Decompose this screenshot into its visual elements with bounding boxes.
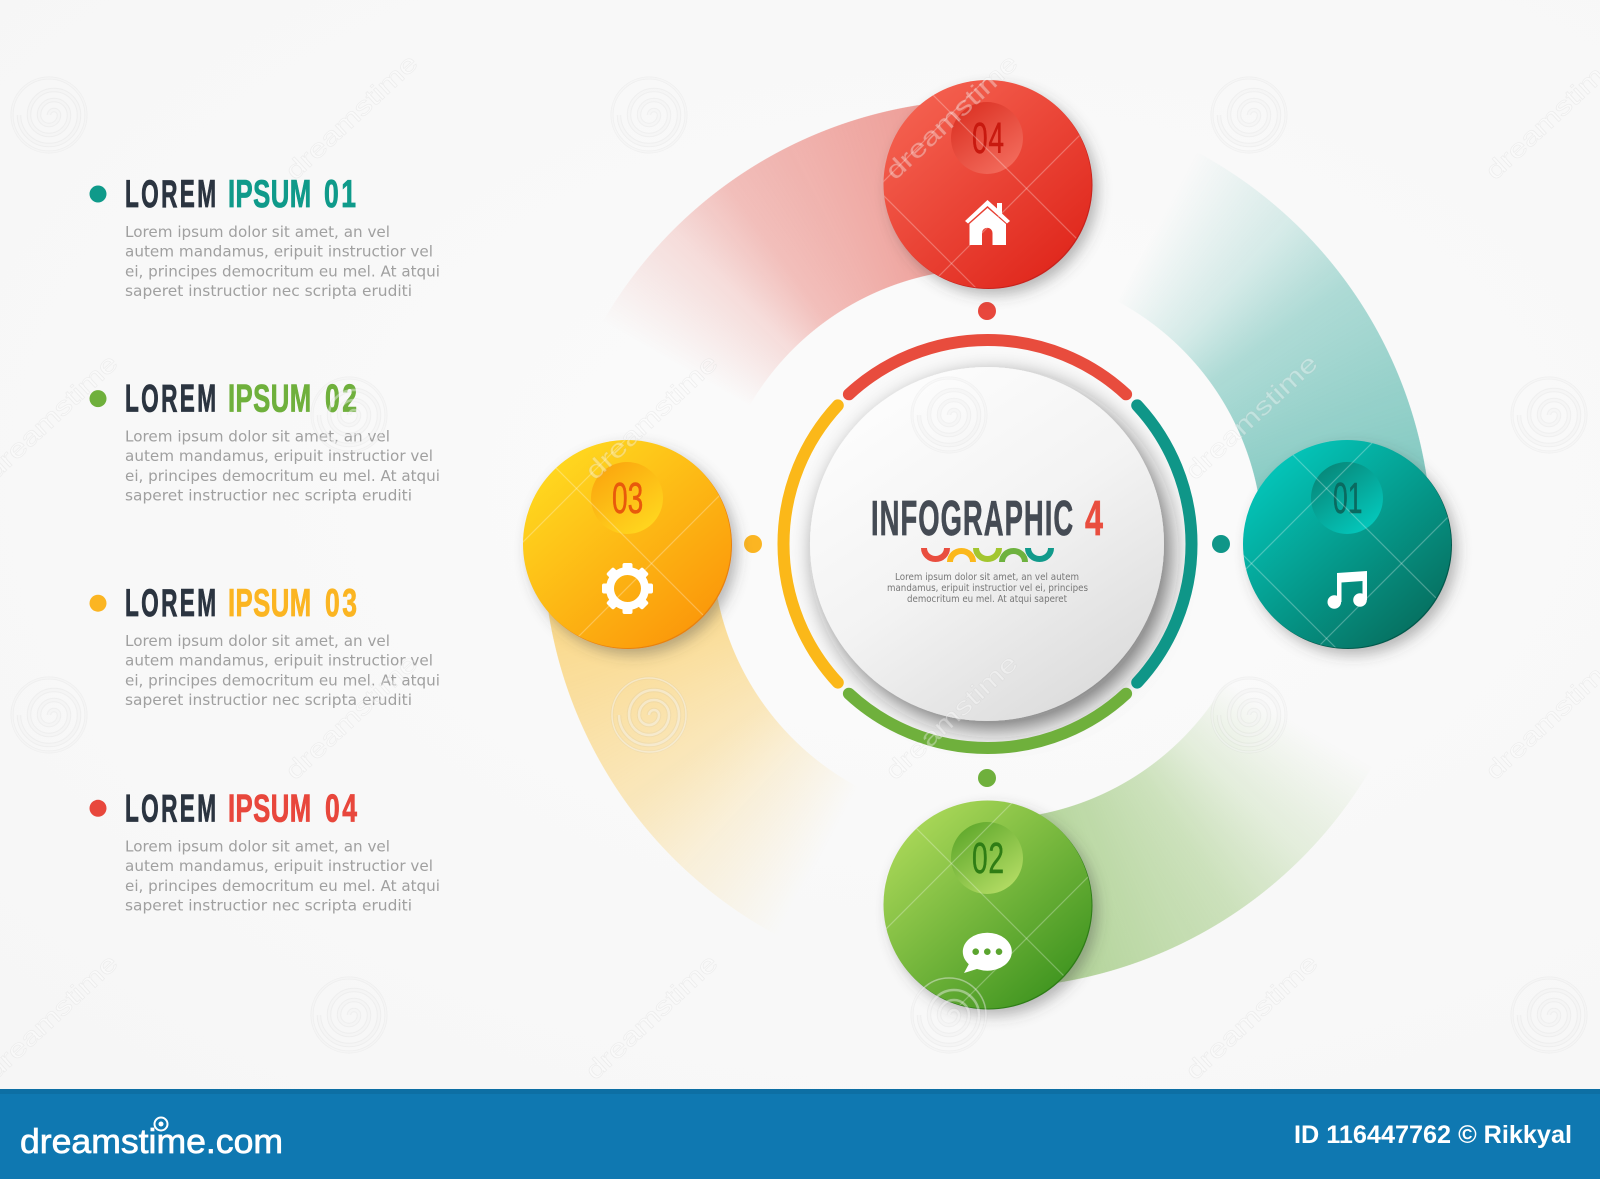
- list item 01: ei, principes democritum eu mel. At atqui: [125, 262, 440, 280]
- node 02: 02: [972, 834, 1004, 883]
- list item 01: autem mandamus, eripuit instructior vel: [125, 242, 433, 260]
- ring segments: [783, 340, 1192, 748]
- list item 01: IPSUM: [228, 173, 311, 216]
- footer bar: [0, 1089, 1600, 1179]
- panel: left list: [90, 172, 440, 914]
- watermark lattice lines: [523, 80, 1448, 1005]
- watermark text: dreamstime: [1480, 49, 1600, 185]
- watermark text: dreamstime: [280, 649, 423, 785]
- list item 01: Lorem ipsum dolor sit amet, an vel: [125, 223, 390, 241]
- watermark text: dreamstime: [1480, 649, 1600, 785]
- list item 02: ei, principes democritum eu mel. At atqui: [125, 467, 440, 485]
- footer logo: dreamstime.com: [20, 1123, 283, 1161]
- footer credit: ID 116447762 © Rikkyal: [1294, 1121, 1572, 1149]
- list item 03: LOREM: [125, 581, 216, 625]
- centre title: 4: [1085, 490, 1103, 546]
- band: red fade arc: [618, 104, 934, 390]
- list item 02: [90, 376, 440, 505]
- band: yellow fade arc: [548, 598, 842, 922]
- icon: house: [965, 200, 1010, 245]
- list item 02: saperet instructior nec scripta eruditi: [125, 487, 412, 505]
- list item 04: 04: [325, 787, 357, 831]
- list item 02: autem mandamus, eripuit instructior vel: [125, 447, 433, 465]
- centre title: INFOGRAPHIC: [871, 492, 1073, 546]
- watermark text: dreamstime: [880, 649, 1023, 785]
- list item 04: Lorem ipsum dolor sit amet, an vel: [125, 837, 390, 855]
- list item 03: ei, principes democritum eu mel. At atqui: [125, 672, 440, 690]
- list item 04: ei, principes democritum eu mel. At atqui: [125, 877, 440, 895]
- node 03: 03: [612, 474, 643, 523]
- list item 02: 02: [325, 378, 357, 421]
- central disc: [810, 367, 1164, 721]
- watermark text: dreamstime: [580, 949, 723, 1085]
- list item 02: Lorem ipsum dolor sit amet, an vel: [125, 428, 390, 446]
- centre description: [887, 572, 1088, 605]
- list item 04: [90, 786, 440, 914]
- node 01: [1243, 440, 1452, 649]
- list item 01: saperet instructior nec scripta eruditi: [125, 282, 412, 300]
- wave decoration: [924, 548, 1051, 562]
- list item 01: LOREM: [125, 172, 216, 216]
- node 04: 04: [972, 114, 1004, 163]
- icon: gear: [602, 563, 653, 614]
- list item 03: saperet instructior nec scripta eruditi: [125, 691, 412, 709]
- list item 04: LOREM: [125, 786, 216, 830]
- watermark text: dreamstime: [580, 349, 723, 485]
- icon: speech bubble: [963, 933, 1012, 973]
- panel: circular diagram: [523, 80, 1452, 1010]
- watermark text: dreamstime: [1180, 949, 1323, 1085]
- watermark text: dreamstime: [880, 49, 1023, 185]
- node 03: [523, 440, 732, 649]
- list item 03: Lorem ipsum dolor sit amet, an vel: [125, 632, 390, 650]
- node 04: [884, 80, 1092, 289]
- band: green fade arc: [1039, 698, 1356, 983]
- centre description: Lorem ipsum dolor sit amet, an vel autem: [895, 572, 1079, 583]
- connector dots: [744, 302, 1230, 787]
- list item 01: 01: [324, 173, 356, 216]
- list item 04: autem mandamus, eripuit instructior vel: [125, 857, 433, 875]
- list item 03: IPSUM: [228, 582, 311, 626]
- watermark text: dreamstime: [1180, 349, 1323, 485]
- list item 02: LOREM: [125, 376, 216, 420]
- centre description: democritum eu mel. At atqui saperet: [907, 594, 1067, 605]
- centre description: mandamus, eripuit instructior vel ei, principes: [887, 583, 1088, 594]
- node 02: [884, 800, 1092, 1010]
- list item 03: 03: [325, 582, 357, 626]
- list item 02: IPSUM: [228, 377, 311, 421]
- list item 03: [90, 581, 440, 709]
- node 01: 01: [1333, 473, 1362, 523]
- watermark text: dreamstime: [280, 49, 423, 185]
- list item 04: IPSUM: [228, 787, 311, 831]
- icon: music note: [1328, 571, 1367, 609]
- band: teal fade arc: [1131, 165, 1427, 491]
- list item 04: saperet instructior nec scripta eruditi: [125, 896, 412, 914]
- list item 01: [90, 172, 440, 300]
- list item 03: autem mandamus, eripuit instructior vel: [125, 652, 433, 670]
